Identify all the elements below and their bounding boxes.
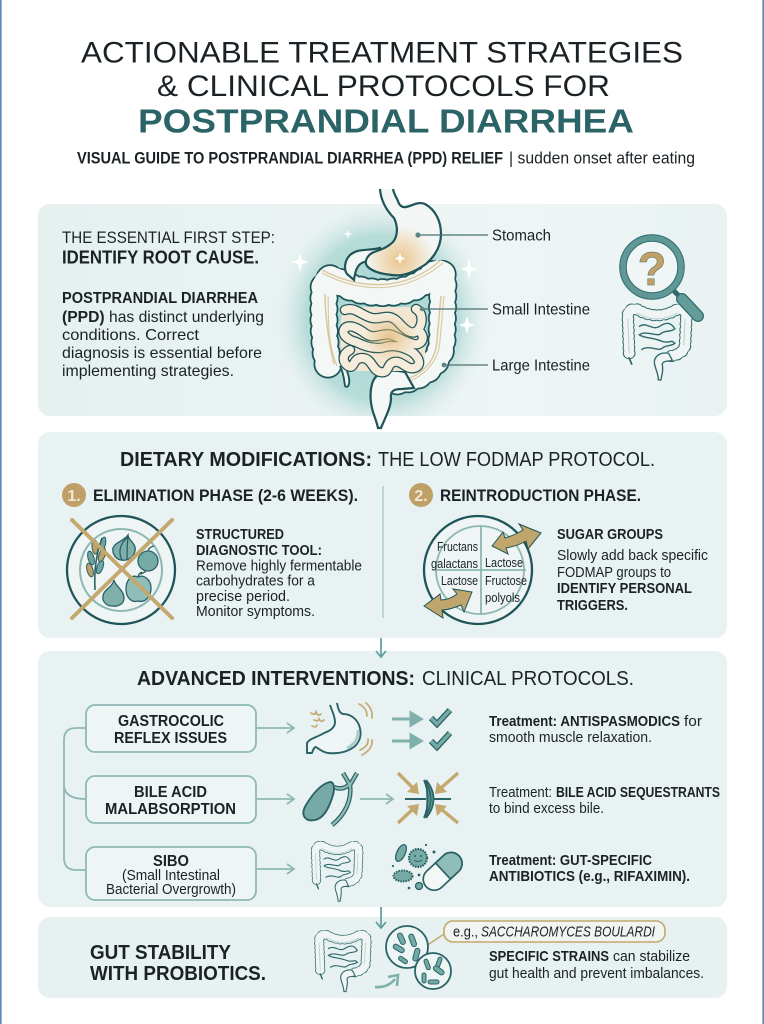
rectum (370, 371, 414, 428)
callout: stomach (415, 228, 551, 244)
text: specific strains: SPECIFIC STRAINS (489, 948, 609, 965)
box: sibo: Bacterial Overgrowth) (106, 882, 236, 898)
icon: gut (319, 935, 367, 992)
text: antispasmodics treatment: Treatment: ANTISPASMODICS (489, 713, 680, 730)
text: sugar groups: Slowly add back specific (557, 547, 708, 564)
heading: elimination phase (62, 483, 358, 507)
text: ppd description: (PPD) has distinct underlying (62, 309, 264, 326)
stomach (366, 189, 441, 275)
onion (113, 535, 135, 560)
panel: advanced interventions (38, 651, 727, 907)
panel: dietary modifications (38, 432, 727, 638)
text: essential first step (62, 228, 275, 268)
icon: probiotic colonies (375, 926, 451, 989)
text: bile acid sequestrants treatment: Treatment: (489, 784, 552, 801)
text: bile acid sequestrants treatment (489, 784, 720, 817)
chart: fodmap sugar groups wheel: polyols (485, 590, 520, 605)
chart: fodmap sugar groups wheel: Lactose (441, 573, 478, 588)
icon: small gut for sibo (316, 845, 359, 901)
heading: gut stability: WITH PROBIOTICS. (90, 962, 266, 985)
heading: clinical protocols: ADVANCED INTERVENTIONS: (137, 668, 415, 690)
box: bile acid malabsorption: BILE ACID (134, 784, 207, 801)
large intestine (322, 260, 444, 387)
callout: saccharomyces boulardi: e.g., (453, 924, 478, 940)
chart: fodmap sugar groups wheel (424, 516, 541, 624)
heading: clinical protocols (137, 668, 634, 690)
box: bile acid malabsorption: MALABSORPTION (105, 801, 236, 818)
arrow: box 2 (256, 794, 294, 804)
text: ppd description: diagnosis is essential before (62, 345, 262, 362)
arrow: lower swap (424, 589, 472, 618)
box: sibo: SIBO (153, 853, 189, 870)
heading: elimination phase: ELIMINATION PHASE (2-6 WEEKS). (93, 487, 358, 505)
text: structured diagnostic tool (196, 527, 362, 620)
text: structured diagnostic tool: DIAGNOSTIC TOOL: (196, 543, 322, 559)
callout: stomach: Stomach (492, 228, 551, 244)
text: sugar groups (557, 526, 708, 614)
box: bile acid malabsorption (86, 776, 256, 823)
text: structured diagnostic tool: precise period. (196, 589, 290, 605)
fig (103, 580, 124, 606)
subtitle: | sudden onset after eating (509, 150, 695, 168)
text: specific strains (489, 948, 704, 982)
text: structured diagnostic tool: carbohydrates for a (196, 574, 316, 590)
title: POSTPRANDIAL DIARRHEA (138, 102, 634, 140)
arrow: box 3 (256, 864, 294, 874)
small intestine (341, 307, 425, 372)
connector tree (64, 728, 86, 870)
text: antispasmodics treatment: smooth muscle relaxation. (489, 729, 652, 746)
wheat (85, 537, 107, 590)
callout: large intestine: Large Intestine (492, 358, 590, 374)
text: bile acid sequestrants treatment: BILE ACID SEQUESTRANTS (556, 784, 720, 801)
title: & CLINICAL PROTOCOLS FOR (157, 70, 610, 103)
text: ppd description: implementing strategies. (62, 363, 234, 380)
panel: identify root cause (38, 189, 727, 440)
text: antibiotics treatment (489, 852, 690, 885)
arrow: gallbladder to binding (360, 794, 393, 804)
subtitle: VISUAL GUIDE TO POSTPRANDIAL DIARRHEA (PPD) RELIEF (77, 150, 503, 168)
text: sugar groups: IDENTIFY PERSONAL (557, 580, 692, 597)
text: sugar groups: SUGAR GROUPS (557, 526, 663, 543)
sparkles (291, 229, 478, 334)
box: gastrocolic reflex issues: GASTROCOLIC (118, 713, 224, 730)
heading: low fodmap (120, 449, 655, 471)
box: sibo (86, 847, 256, 900)
apple small (138, 546, 158, 571)
icon: spasming stomach (307, 703, 372, 755)
chart: fodmap sugar groups wheel: Fructose (485, 573, 527, 588)
text: structured diagnostic tool: Monitor symptoms. (196, 604, 315, 620)
text: essential first step: THE ESSENTIAL FIRST STEP: (62, 228, 275, 247)
icon: bile acid binding (398, 773, 458, 823)
chart: fodmap sugar groups wheel: Lactose (485, 555, 523, 570)
apple large (126, 571, 151, 601)
icon: bacteria and antibiotic capsule (392, 843, 467, 895)
text: bile acid sequestrants treatment: to bind excess bile. (489, 800, 604, 817)
text: ppd description (62, 290, 264, 380)
chart: fodmap sugar groups wheel: Fructans (437, 539, 478, 554)
text: ppd description: conditions. Correct (62, 327, 200, 344)
arrow: box 1 (256, 723, 294, 733)
illustration: digestive system (322, 189, 444, 428)
callout: small intestine (420, 302, 590, 318)
heading: low fodmap: DIETARY MODIFICATIONS: (120, 449, 372, 471)
icon: magnifier over gut: ? (638, 242, 666, 295)
heading: reintroduction phase: 2. (414, 488, 428, 505)
text: antibiotics treatment: ANTIBIOTICS (e.g., RIFAXIMIN). (489, 868, 690, 885)
text: specific strains: gut health and prevent imbalances. (489, 965, 704, 982)
heading: gut stability: GUT STABILITY (90, 941, 231, 964)
callout: large intestine (442, 358, 590, 374)
text: essential first step: IDENTIFY ROOT CAUSE. (62, 248, 259, 268)
heading: low fodmap: THE LOW FODMAP PROTOCOL. (378, 449, 655, 471)
arrow: upper swap (492, 524, 541, 554)
callout: saccharomyces boulardi: SACCHAROMYCES BOULARDI (481, 924, 655, 940)
text: sugar groups: FODMAP groups to (557, 564, 671, 581)
chart: fodmap sugar groups wheel: galactans (431, 556, 478, 571)
heading: reintroduction phase: REINTRODUCTION PHASE. (440, 487, 641, 505)
title: ACTIONABLE TREATMENT STRATEGIES (81, 36, 683, 70)
text: antispasmodics treatment: for (684, 713, 702, 730)
heading: clinical protocols: CLINICAL PROTOCOLS. (422, 668, 634, 690)
text: antispasmodics treatment (489, 713, 702, 746)
heading: elimination phase: 1. (67, 488, 81, 505)
heading: gut stability (90, 941, 266, 985)
arrow: advanced to probiotics (376, 907, 386, 928)
text: specific strains: can stabilize (613, 948, 690, 965)
text: sugar groups: TRIGGERS. (557, 597, 628, 614)
callout: saccharomyces boulardi (444, 921, 665, 942)
icon: magnifier over gut (623, 238, 698, 380)
icon: crossed-out food plate (67, 516, 175, 624)
text: ppd description: POSTPRANDIAL DIARRHEA (62, 290, 258, 307)
text: structured diagnostic tool: Remove highly fermentable (196, 558, 362, 574)
text: antibiotics treatment: Treatment: GUT-SPECIFIC (489, 852, 652, 869)
panel: probiotics (38, 917, 727, 998)
icon: gallbladder (303, 773, 357, 825)
box: sibo: (Small Intestinal (122, 868, 220, 884)
arrow: dietary to advanced (376, 638, 386, 657)
callout: small intestine: Small Intestine (492, 302, 590, 318)
heading: reintroduction phase (409, 483, 641, 507)
box: gastrocolic reflex issues: REFLEX ISSUES (114, 730, 227, 747)
title (81, 36, 683, 140)
text: structured diagnostic tool: STRUCTURED (196, 527, 284, 543)
box: gastrocolic reflex issues (86, 705, 256, 752)
duodenum (345, 248, 380, 280)
icon: arrows and checkmarks (392, 710, 450, 747)
